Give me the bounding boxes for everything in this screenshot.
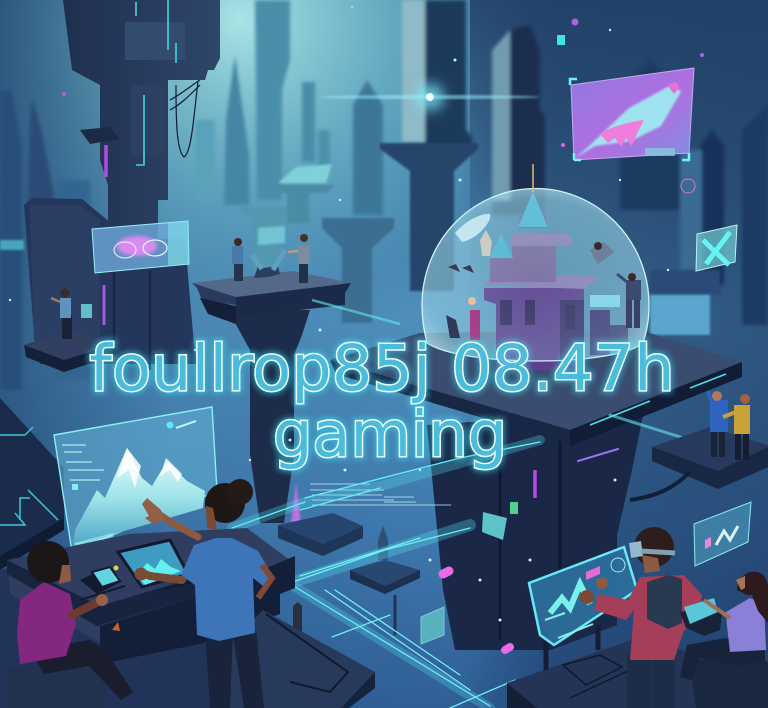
hologram: left purple gamepad bbox=[92, 221, 189, 273]
main floating platform and pedestal bbox=[330, 330, 742, 650]
pink beam and small text block bbox=[291, 482, 451, 524]
floor beneath the console users bbox=[0, 565, 375, 708]
small robot figure bbox=[280, 602, 312, 643]
person: VR headset user in red bbox=[580, 527, 702, 708]
hologram: small right panel bbox=[694, 502, 751, 566]
console platform with screens bbox=[7, 528, 295, 664]
person: standing woman in blue bbox=[134, 479, 273, 708]
title bbox=[90, 331, 674, 471]
glowing circuit pathways bbox=[232, 415, 690, 708]
title: gaming bbox=[273, 397, 507, 471]
scattered glowing particles bbox=[9, 6, 704, 622]
side holograms bbox=[681, 179, 737, 271]
central floating platform with two people bbox=[192, 234, 400, 523]
VR user hologram panel bbox=[529, 547, 637, 670]
bottom right platform bbox=[507, 637, 768, 708]
distant skyscrapers bbox=[0, 0, 768, 390]
title: foullrop85j 08.47h bbox=[90, 331, 674, 405]
hologram: mountain chart bbox=[54, 407, 217, 552]
icon: small tablet bbox=[92, 567, 120, 587]
light flare bbox=[320, 83, 540, 111]
figures inside dome bbox=[446, 230, 641, 340]
title: foullrop85j 08.47h bbox=[90, 331, 674, 405]
people on right platform bbox=[708, 391, 750, 460]
right small platform with two people bbox=[630, 391, 768, 500]
small distant platforms bbox=[278, 513, 444, 644]
person: seated user in lavender bbox=[680, 572, 768, 708]
mid-ground platform pedestals bbox=[0, 143, 720, 335]
person: seated boy in purple bbox=[6, 541, 133, 708]
castle bbox=[484, 192, 628, 370]
tower: left block bbox=[24, 198, 198, 370]
left corner platform bbox=[0, 398, 64, 570]
icon: mountain peaks bbox=[73, 448, 205, 546]
platform with person, left bbox=[24, 288, 116, 372]
hologram: top right hand panel bbox=[570, 68, 694, 160]
icon: large tablet with chart bbox=[118, 540, 188, 587]
lower centre platform bbox=[226, 610, 375, 708]
title: gaming bbox=[273, 397, 507, 471]
glass dome with castle bbox=[422, 164, 649, 370]
tower: upper left megastructure bbox=[63, 0, 220, 338]
